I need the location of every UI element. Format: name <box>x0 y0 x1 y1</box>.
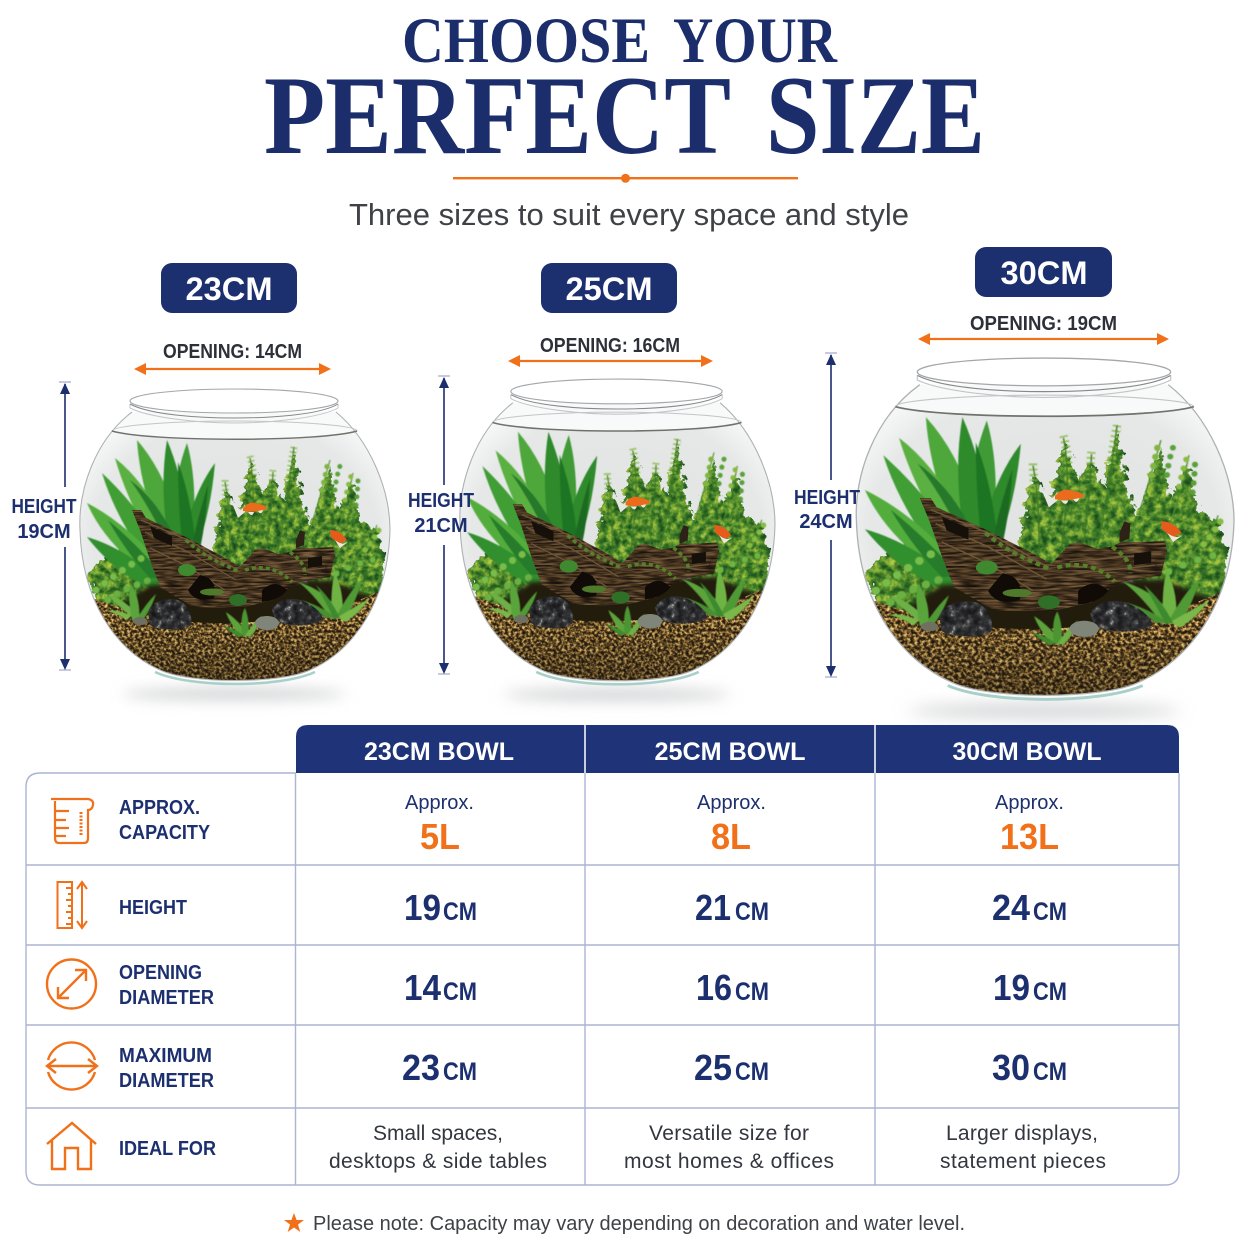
title line 1: YOUR <box>673 5 838 77</box>
size pill: 23cm <box>161 263 297 313</box>
bowl: 23cm <box>70 389 400 700</box>
opening label: 16cm <box>508 335 713 367</box>
height label: 21cm <box>408 490 474 537</box>
row: height: 24 <box>992 887 1030 928</box>
row: capacity: 5L <box>420 816 460 857</box>
height arrow: 21cm <box>438 376 450 674</box>
table header: 30CM BOWL <box>952 738 1102 766</box>
row: height: 21 <box>695 887 731 928</box>
row: maximum diameter: 25 <box>694 1047 732 1088</box>
title line 1: CHOOSE <box>402 5 650 77</box>
row: capacity: 13L <box>1000 816 1059 857</box>
height arrow: 19cm <box>12 382 76 670</box>
icon: ruler and arrow <box>58 882 87 928</box>
height arrow: 19cm: HEIGHT <box>12 496 76 518</box>
title line 2: SIZE <box>766 54 985 178</box>
table grid <box>26 773 1179 1185</box>
size pill: 23cm: 23CM <box>186 271 272 307</box>
row: maximum diameter: DIAMETER <box>119 1070 214 1092</box>
opening label: 14cm <box>134 341 331 375</box>
height label: 21cm: 21CM <box>414 515 468 537</box>
row: capacity: APPROX. <box>119 797 200 819</box>
title <box>264 5 985 178</box>
size pill: 25cm <box>541 263 677 313</box>
row: opening diameter: CM <box>443 978 477 1006</box>
row: ideal for: Larger displays, <box>946 1122 1098 1145</box>
footnote: Please note: Capacity may vary depending on decoration and water level. <box>313 1213 965 1235</box>
height label: 24cm: HEIGHT <box>794 487 860 509</box>
opening label: 16cm: OPENING: 16CM <box>540 335 680 357</box>
row: maximum diameter: CM <box>735 1058 769 1086</box>
row: ideal for <box>47 1122 1106 1173</box>
row: height <box>58 882 1067 928</box>
row: maximum diameter: CM <box>1033 1058 1067 1086</box>
height arrow: 24cm <box>825 353 837 677</box>
opening label: 19cm <box>918 313 1169 345</box>
row: opening diameter: 16 <box>696 967 732 1008</box>
subtitle: Three sizes to suit every space and style <box>349 197 909 232</box>
height label: 21cm: HEIGHT <box>408 490 474 512</box>
icon: sphere with horizontal arrow <box>47 1042 97 1090</box>
row: capacity: Approx. <box>405 792 474 814</box>
row: ideal for: IDEAL FOR <box>119 1138 216 1160</box>
row: capacity: 8L <box>711 816 751 857</box>
row: ideal for: desktops & side tables <box>329 1150 547 1173</box>
title line 2: PERFECT <box>264 54 731 178</box>
icon: star <box>284 1213 304 1232</box>
row: opening diameter <box>47 960 1067 1009</box>
row: opening diameter: DIAMETER <box>119 987 214 1009</box>
row: height: CM <box>443 898 477 926</box>
title line 1 <box>402 5 838 77</box>
height label: 24cm: 24CM <box>799 511 853 533</box>
table header: 23CM BOWL <box>364 738 514 766</box>
opening label: 14cm: OPENING: 14CM <box>163 341 302 363</box>
row: opening diameter: 14 <box>404 967 441 1008</box>
icon: beaker <box>51 799 93 843</box>
row: height: HEIGHT <box>119 897 187 919</box>
row: maximum diameter <box>47 1042 1067 1092</box>
row: ideal for: statement pieces <box>940 1150 1106 1173</box>
row: maximum diameter: CM <box>443 1058 477 1086</box>
row: capacity: Approx. <box>697 792 766 814</box>
row: capacity <box>51 792 1064 857</box>
row: ideal for: Versatile size for <box>649 1122 809 1145</box>
table header: 25CM BOWL <box>654 738 806 766</box>
size pill: 25cm: 25CM <box>566 271 652 307</box>
icon: circle with diagonal arrow <box>47 960 96 1008</box>
row: ideal for: most homes & offices <box>624 1150 834 1173</box>
comparison table <box>26 725 1179 1185</box>
row: opening diameter: CM <box>735 978 769 1006</box>
size pill: 30cm: 30CM <box>1000 255 1088 291</box>
row: opening diameter: 19 <box>993 967 1030 1008</box>
height label: 24cm <box>794 487 860 533</box>
bowl: 30cm <box>844 358 1246 718</box>
bowl: 25cm <box>450 379 785 701</box>
icon: house <box>47 1123 96 1169</box>
row: capacity: Approx. <box>995 792 1064 814</box>
row: maximum diameter: 23 <box>402 1047 440 1088</box>
row: maximum diameter: 30 <box>992 1047 1030 1088</box>
row: height: CM <box>1033 898 1067 926</box>
row: height: CM <box>735 898 769 926</box>
opening label: 19cm: OPENING: 19CM <box>970 313 1117 335</box>
row: opening diameter: CM <box>1033 978 1067 1006</box>
height arrow: 19cm: 19CM <box>17 521 71 543</box>
row: opening diameter: OPENING <box>119 962 202 984</box>
row: maximum diameter: MAXIMUM <box>119 1045 212 1067</box>
row: height: 19 <box>404 887 441 928</box>
row: ideal for: Small spaces, <box>373 1122 503 1145</box>
title divider <box>453 174 798 183</box>
table header <box>296 725 1179 773</box>
size pill: 30cm <box>975 247 1112 297</box>
row: capacity: CAPACITY <box>119 822 211 844</box>
